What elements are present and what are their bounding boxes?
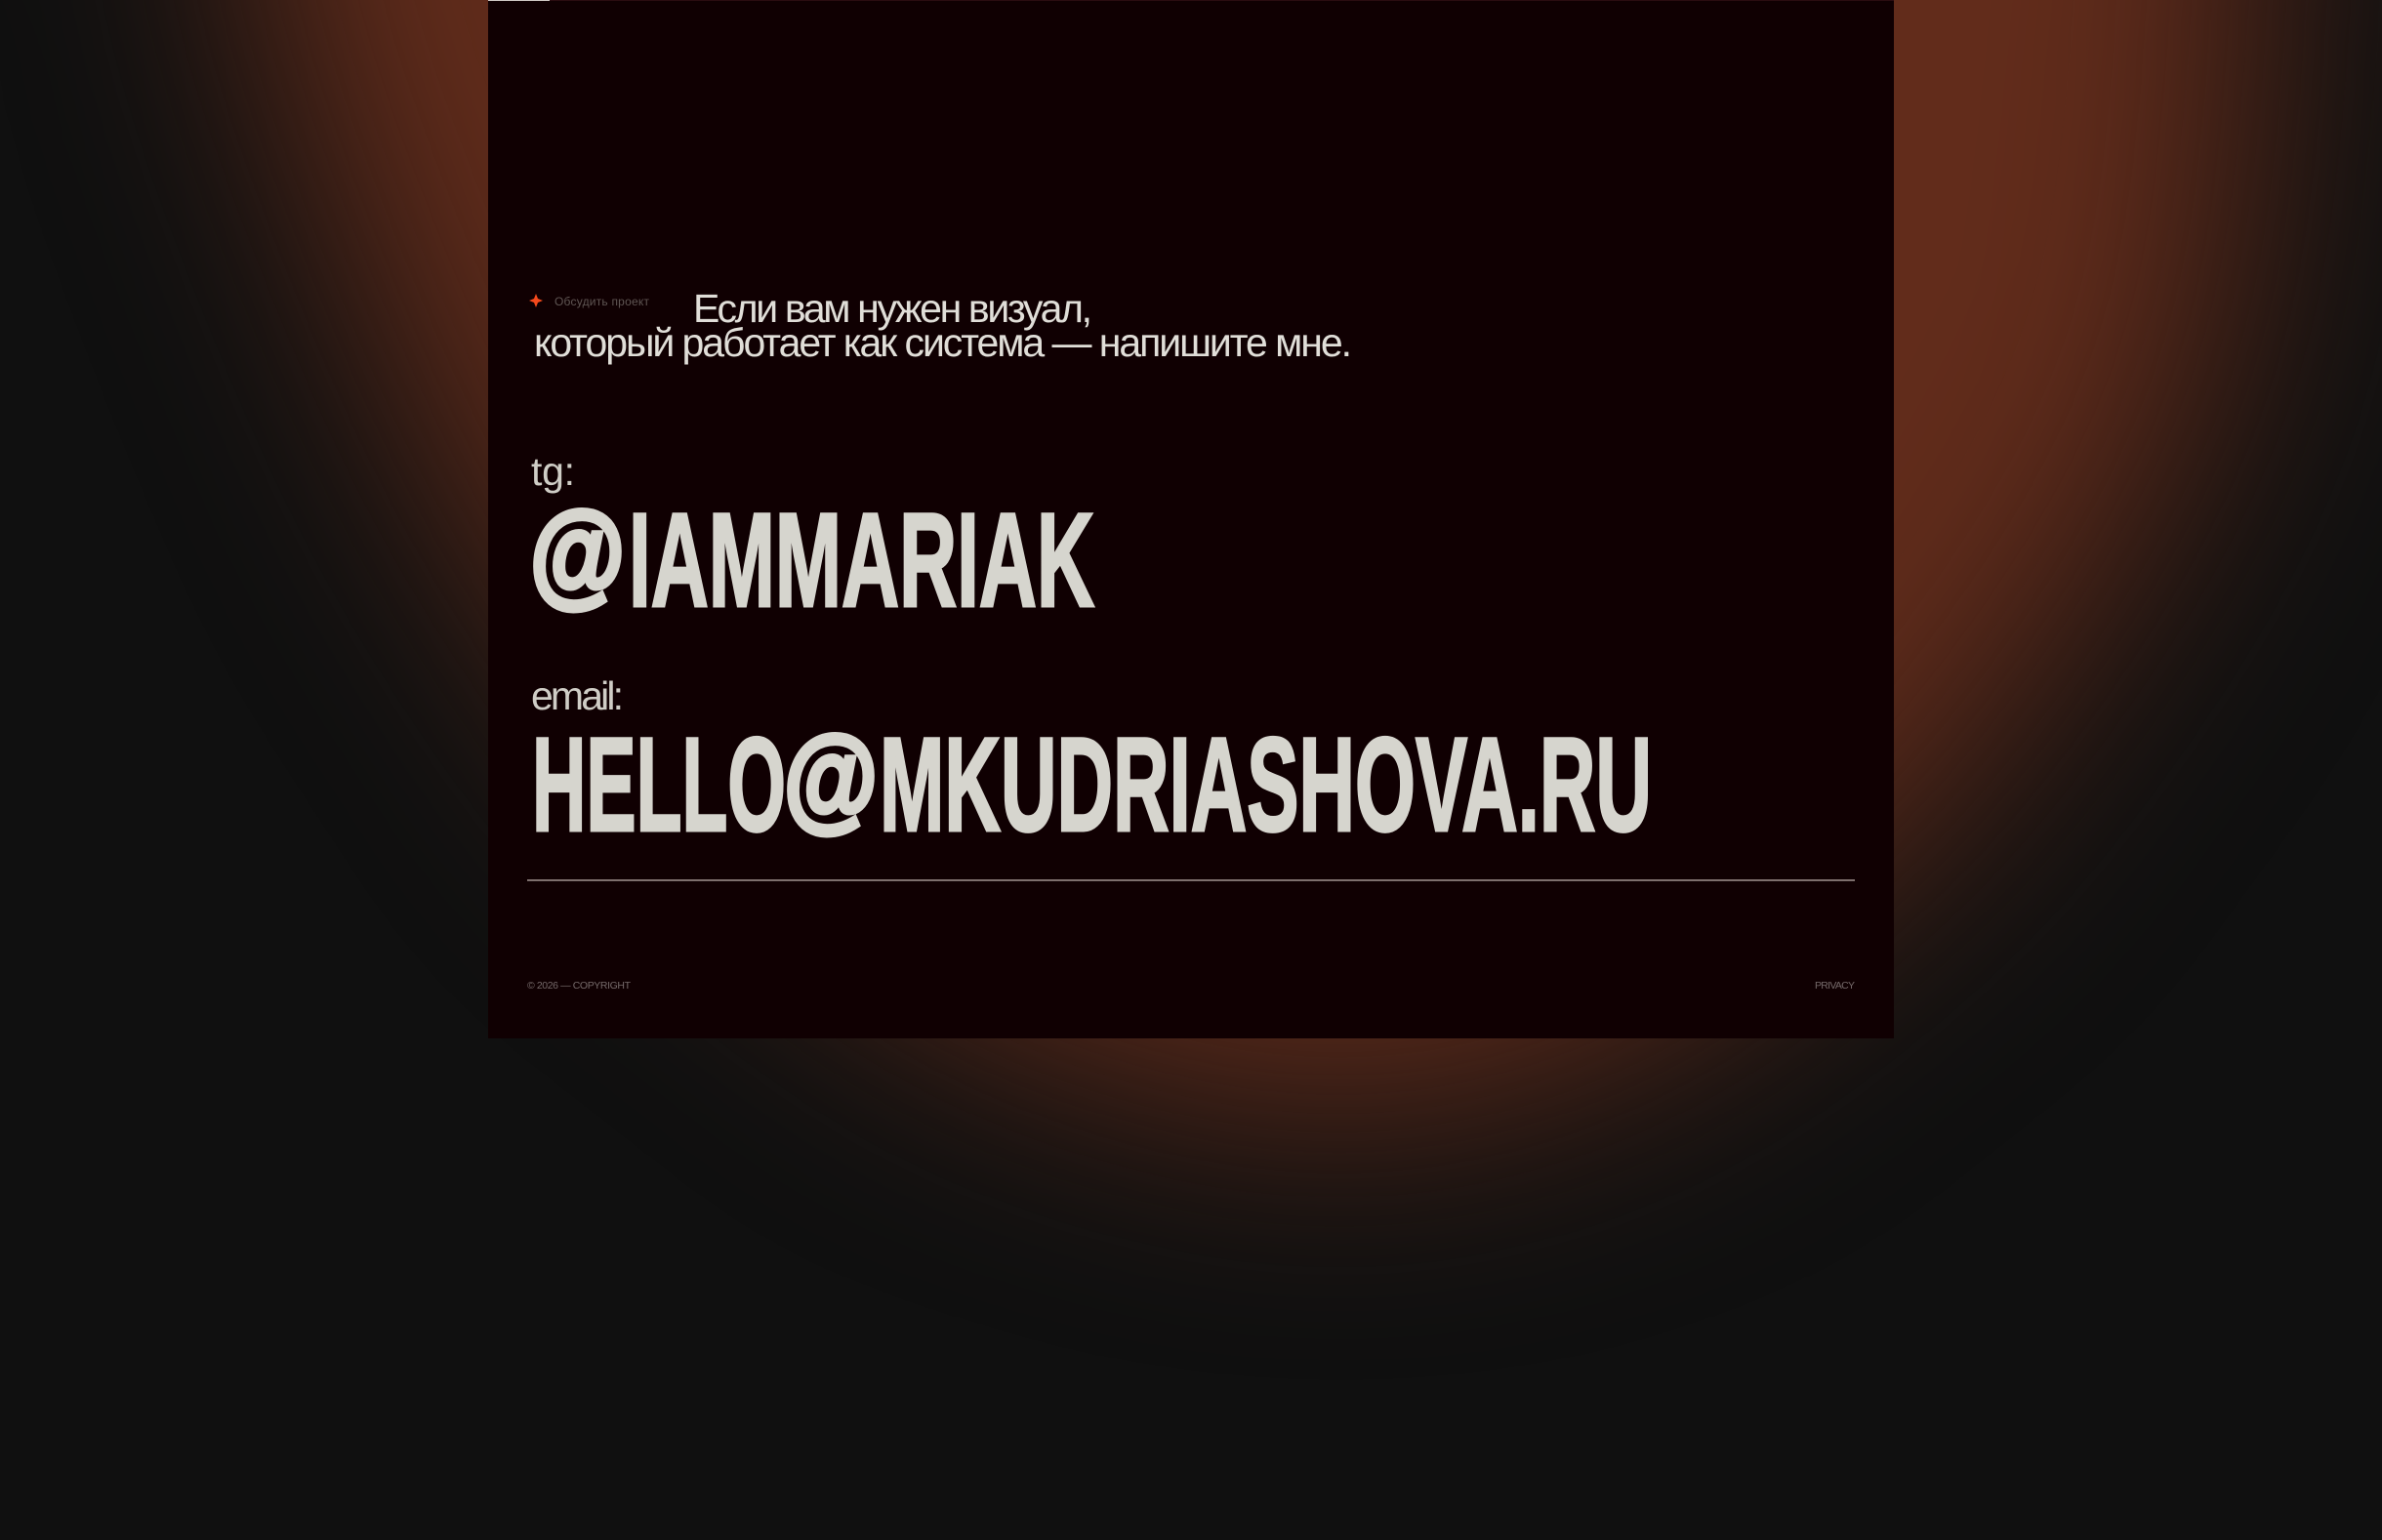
top progress bar: [488, 0, 1894, 1]
heading: Если вам нужен визуал,: [693, 286, 1092, 331]
icon: orange star: [529, 294, 543, 307]
label: tg: tg:: [531, 449, 575, 494]
email address: HELLO: [532, 710, 786, 860]
orange glow: [205, 0, 2255, 1108]
email address: MKUDRIASHOVA.RU: [880, 710, 1652, 860]
heading: [534, 286, 1352, 365]
label: email: email:: [531, 673, 624, 718]
panel: contact: [488, 0, 1894, 1038]
footer privacy link: PRIVACY: [1815, 980, 1855, 992]
telegram handle: IAMMARIAK: [629, 486, 1094, 635]
email address: @: [784, 713, 878, 842]
footer copyright: © 2026 — COPYRIGHT: [527, 980, 632, 992]
telegram handle: @: [530, 489, 625, 618]
footer divider: [527, 879, 1855, 881]
label: discuss project: Обсудить проект: [554, 295, 650, 308]
heading: который работает как система — напишите мне.: [534, 320, 1352, 365]
